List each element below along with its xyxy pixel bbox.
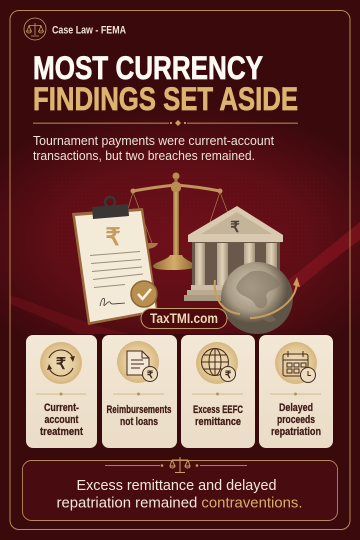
callout: conclusion: repatriation remained contraventions. <box>56 496 302 512</box>
badge icon: scales <box>24 18 46 40</box>
subtitle: transactions, but two breaches remained. <box>33 148 255 163</box>
callout: conclusion: Excess remittance and delayed <box>76 478 276 494</box>
panel: excess EEFC remittance: Excess EEFC <box>193 404 243 416</box>
illustration: bank: ₹ <box>230 219 240 236</box>
panel: current-account treatment <box>26 335 97 448</box>
icon: scales <box>170 457 190 472</box>
panel: reimbursements not loans: not loans <box>120 416 158 428</box>
title: MOST CURRENCY <box>33 50 263 86</box>
panel: current-account treatment: treatment <box>40 426 83 438</box>
rupee symbol: ₹ <box>105 224 121 251</box>
title: FINDINGS SET ASIDE <box>33 81 298 117</box>
icon: document with rupee: ₹ <box>147 370 154 381</box>
website badge <box>141 308 227 328</box>
panel: excess EEFC remittance <box>181 335 255 448</box>
subtitle <box>33 133 274 163</box>
illustration: bank <box>184 206 283 301</box>
icon: calendar with clock <box>275 342 317 384</box>
panel: excess EEFC remittance: remittance <box>195 416 241 428</box>
title <box>33 50 298 117</box>
panel: current-account treatment: Current- <box>44 402 79 414</box>
illustration: balance scale <box>118 172 238 270</box>
illustration: globe <box>215 262 300 334</box>
panel: delayed proceeds repatriation: Delayed <box>279 402 313 414</box>
title divider <box>33 120 298 126</box>
website badge: TaxTMI.com <box>150 311 218 326</box>
callout: conclusion <box>22 457 338 520</box>
panel: reimbursements not loans: Reimbursements <box>106 404 172 416</box>
panel: delayed proceeds repatriation: repatriation <box>271 426 321 438</box>
subtitle: Tournament payments were current-account <box>33 133 274 148</box>
icon: rupee cycle: ₹ <box>56 356 66 373</box>
category label: Case Law - FEMA <box>52 24 126 36</box>
panel: reimbursements not loans <box>102 335 177 448</box>
panel: delayed proceeds repatriation <box>259 335 333 448</box>
illustration: clipboard <box>72 197 158 325</box>
panel: current-account treatment: account <box>44 414 79 426</box>
decorative red swooshes <box>0 222 360 540</box>
icon: globe with rupee: ₹ <box>225 370 232 381</box>
panel: delayed proceeds repatriation: proceeds <box>277 414 315 426</box>
